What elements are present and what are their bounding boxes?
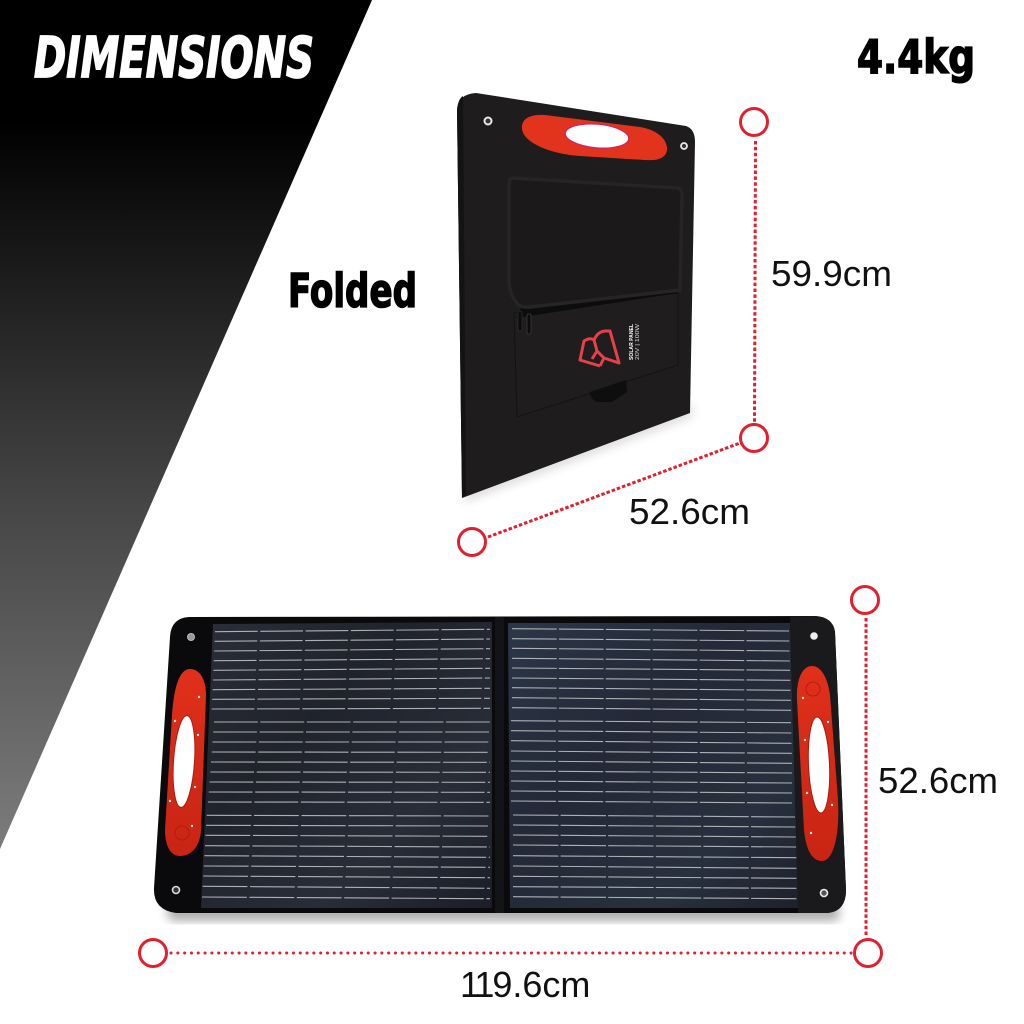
right handle opening [806, 717, 832, 813]
handle grip [522, 115, 667, 160]
left array busbars middle group [208, 722, 490, 802]
zipper pulls [518, 311, 531, 334]
title: DIMENSIONS [34, 26, 314, 91]
pull two [527, 314, 531, 334]
gradient diagonal background panel [0, 0, 372, 849]
product text [629, 324, 641, 360]
lower pocket [514, 293, 678, 417]
panel body [154, 616, 846, 913]
value: 52.6cm [878, 760, 998, 801]
fabric tab [590, 380, 627, 402]
brand logo [580, 331, 619, 366]
marker left [458, 528, 486, 556]
dimension: unfolded height [852, 586, 998, 937]
marker top [740, 108, 768, 136]
marker bottom [740, 424, 768, 452]
dimension: folded height [740, 108, 892, 452]
left array busbars bottom group [202, 815, 490, 899]
unfolded solar panel [154, 616, 846, 921]
dimension: folded width [458, 443, 750, 556]
left handle [165, 669, 206, 856]
right flap [790, 616, 846, 913]
case left edge [457, 96, 466, 498]
folded label: Folded [288, 264, 417, 318]
right array busbars bottom group [513, 815, 798, 899]
dotted line [171, 952, 853, 954]
dimension: unfolded width [140, 940, 882, 1005]
upper pocket [509, 178, 682, 307]
right handle grip [797, 666, 838, 861]
right array busbars top group [512, 629, 791, 710]
right array busbars middle group [511, 721, 793, 803]
dotted line [864, 618, 868, 937]
value: 59.9cm [771, 253, 892, 294]
weight label: 4.4kg [857, 30, 975, 84]
right handle button [806, 682, 820, 696]
value: 52.6cm [629, 491, 750, 532]
product name: SOLAR PANEL [629, 324, 635, 360]
zipper opening [516, 289, 680, 318]
case shadow [464, 405, 694, 502]
grommet bottom right [820, 890, 828, 896]
panel shadow [165, 905, 840, 921]
grommet bottom left [172, 886, 180, 894]
dotted line [488, 443, 740, 537]
left handle opening [170, 715, 198, 808]
marker top [852, 586, 878, 614]
value: 119.6cm [460, 964, 590, 1005]
left handle grip [165, 669, 206, 856]
case body [457, 93, 695, 498]
handle opening [564, 121, 630, 151]
grommet top left [188, 634, 194, 640]
right handle rivets [802, 697, 833, 834]
grommet top right [681, 143, 687, 149]
carry handle [522, 115, 667, 160]
dotted line [754, 141, 756, 422]
grommet top right [810, 632, 818, 640]
left solar array [201, 622, 492, 908]
left handle rivets [169, 696, 200, 827]
marker left [140, 940, 166, 966]
left handle button [175, 826, 189, 840]
center fold strip [495, 617, 504, 913]
folded solar panel case [457, 93, 695, 502]
right handle [797, 666, 838, 861]
grommet top left [484, 118, 492, 124]
left array busbars top group [212, 629, 490, 709]
marker right [854, 940, 882, 966]
right solar array [508, 623, 798, 908]
product rating: 20V | 100W [635, 324, 641, 360]
pull one [518, 311, 522, 331]
